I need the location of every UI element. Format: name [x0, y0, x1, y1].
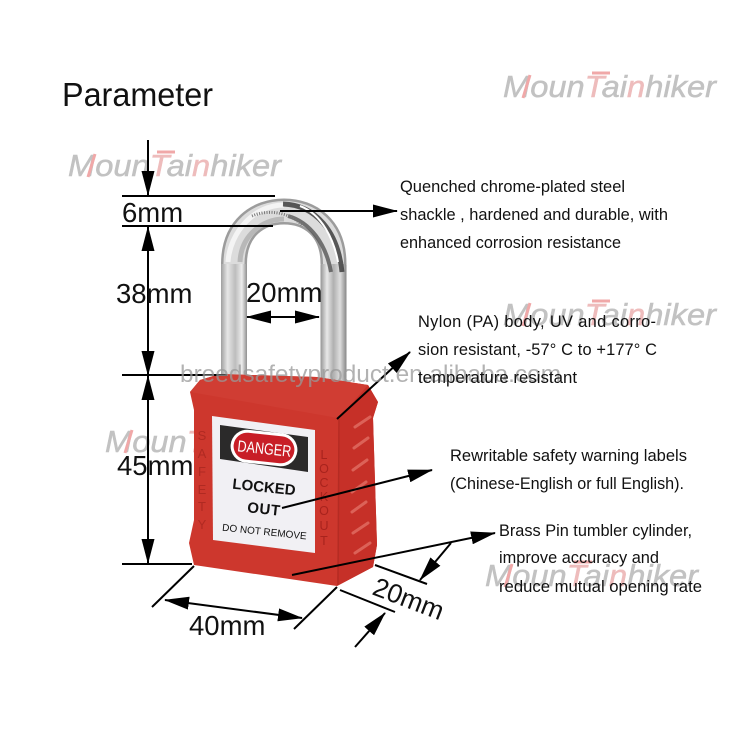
padlock shackle [221, 204, 346, 390]
embossed LOCKOUT text: L [321, 448, 328, 462]
dimension labels: 20mm [369, 572, 448, 626]
body side grip ribs [352, 417, 370, 553]
callout text: shackle: enhanced corrosion resistance [400, 234, 621, 252]
watermark: upper left: MounTainhiker [68, 148, 283, 183]
embossed SAFETY text: Y [198, 517, 207, 532]
watermark: lock front: MounTainhiker [105, 424, 320, 459]
danger label: LOCKED [232, 476, 296, 499]
danger label: OUT [246, 499, 281, 520]
dimension labels [116, 197, 448, 641]
dimension labels: 6mm [122, 197, 183, 228]
callout text: labels: Rewritable safety warning labels [450, 447, 687, 465]
callout arrows [280, 211, 495, 575]
dimension labels: 38mm [116, 278, 192, 309]
callout text: shackle: shackle , hardened and durable, with [400, 206, 668, 224]
embossed LOCKOUT text: K [320, 490, 329, 504]
callout text: body: sion resistant, -57° C to +177° C [418, 341, 657, 359]
watermark: top right: MounTainhiker [503, 69, 718, 104]
embossed SAFETY text: E [198, 482, 207, 497]
padlock body [189, 374, 378, 586]
danger label: DO NOT REMOVE [222, 523, 307, 542]
embossed LOCKOUT text: O [319, 504, 329, 518]
callout text: shackle: Quenched chrome-plated steel [400, 178, 625, 196]
dimension labels: 20mm [246, 277, 322, 308]
watermark: lower right: MounTainhiker [485, 558, 700, 593]
callout text: shackle [400, 178, 668, 252]
callout text: cylinder: Brass Pin tumbler cylinder, [499, 522, 692, 540]
callout text: labels: (Chinese-English or full English). [450, 475, 684, 493]
embossed SAFETY text: T [198, 499, 206, 514]
dimension labels: 40mm [189, 610, 265, 641]
title: Parameter [62, 76, 213, 113]
embossed LOCKOUT text: U [319, 519, 329, 533]
embossed SAFETY text: S [198, 428, 207, 443]
callout text: body: Nylon (PA) body, UV and corro- [418, 313, 656, 331]
callout text: labels [450, 447, 687, 493]
embossed SAFETY text: F [198, 464, 206, 479]
embossed SAFETY text: A [198, 446, 207, 461]
callout text: body [418, 313, 657, 387]
callout text: body: temperature resistant [418, 369, 577, 387]
embossed LOCKOUT text: T [320, 534, 328, 548]
embossed LOCKOUT text: O [319, 462, 329, 476]
danger label: DANGER [237, 438, 292, 461]
callout text: cylinder: reduce mutual opening rate [499, 578, 702, 596]
danger label [212, 416, 315, 553]
embossed LOCKOUT text: C [319, 476, 329, 490]
watermark: middle right: MounTainhiker [503, 297, 718, 332]
dimension lines [122, 140, 451, 647]
dimension labels: 45mm [117, 450, 193, 481]
callout text: cylinder [499, 522, 702, 596]
url watermark: breedsafetyproduct.en.alibaba.com [180, 361, 561, 388]
callout text: cylinder: improve accuracy and [499, 549, 659, 567]
